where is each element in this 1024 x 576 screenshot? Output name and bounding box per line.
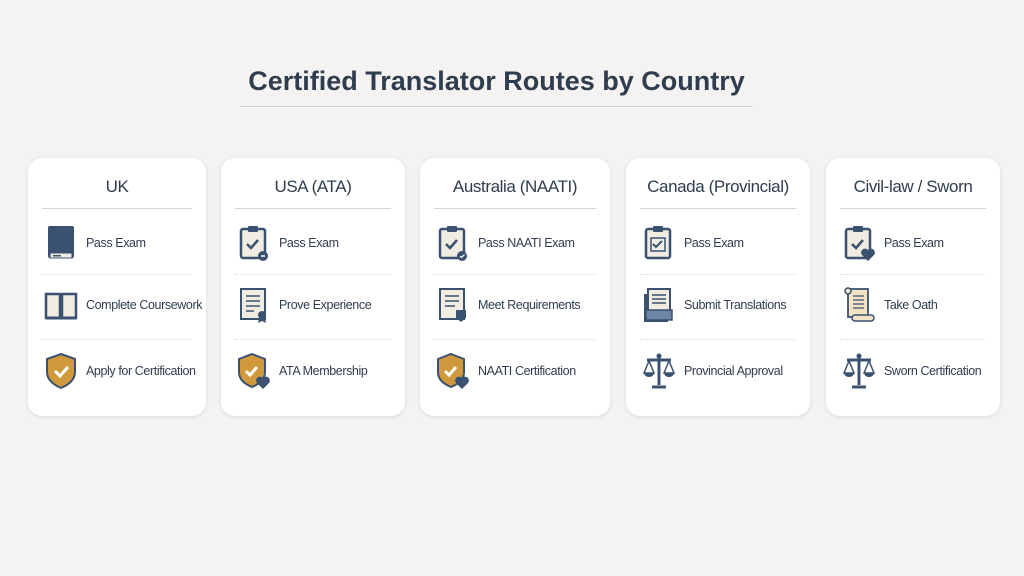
- title: Certified Translator Routes by Country: [248, 66, 745, 96]
- row: Prove Experience: [240, 288, 372, 323]
- heading: USA (ATA): USA (ATA): [274, 177, 352, 196]
- row: Complete Coursework: Complete Coursework: [86, 298, 202, 312]
- row: Meet Requirements: Meet Requirements: [478, 298, 580, 312]
- heading: UK: [42, 174, 192, 209]
- row: Pass Exam: Pass Exam: [86, 236, 146, 250]
- heading: Canada (Provincial): Canada (Provincial): [647, 177, 789, 196]
- row: Take Oath: [844, 287, 937, 322]
- panel: UK: [28, 158, 206, 416]
- row: Sworn Certification: Sworn Certification: [884, 364, 981, 378]
- heading: Civil-law / Sworn: [840, 174, 986, 209]
- row: Prove Experience: Prove Experience: [279, 298, 371, 312]
- row: NAATI Certification: NAATI Certification: [478, 364, 576, 378]
- row: Take Oath: Take Oath: [884, 298, 937, 312]
- row: Pass Exam: [48, 226, 146, 258]
- row: Submit Translations: Submit Translations: [684, 298, 786, 312]
- panel: Canada: [626, 158, 810, 416]
- row: ATA Membership: [238, 352, 368, 389]
- row: Meet Requirements: [439, 288, 580, 322]
- row: Provincial Approval: Provincial Approval: [684, 364, 783, 378]
- row: Pass NAATI Exam: [438, 226, 575, 261]
- panel: Civil-law: [826, 158, 1000, 416]
- row: Complete Coursework: [44, 292, 202, 320]
- row: Pass Exam: [240, 226, 339, 261]
- heading: USA (ATA): [235, 174, 391, 209]
- row: Pass NAATI Exam: Pass NAATI Exam: [478, 236, 575, 250]
- panel: USA: [221, 158, 405, 416]
- row: Provincial Approval: [642, 354, 783, 388]
- row: Submit Translations: [644, 288, 786, 322]
- heading: UK: UK: [106, 177, 128, 196]
- row: Pass Exam: Pass Exam: [684, 236, 744, 250]
- row: Pass Exam: [644, 226, 744, 260]
- row: ATA Membership: ATA Membership: [279, 364, 367, 378]
- row: Pass Exam: [844, 226, 944, 261]
- heading: Civil-law / Sworn: Civil-law / Sworn: [854, 177, 972, 196]
- panel: Australia: [420, 158, 610, 416]
- heading: Australia (NAATI): Australia (NAATI): [453, 177, 577, 196]
- row: Apply for Certification: [46, 353, 196, 390]
- row: Apply for Certification: Apply for Certification: [86, 364, 196, 378]
- row: Pass Exam: Pass Exam: [884, 236, 944, 250]
- row: Sworn Certification: [842, 354, 981, 388]
- heading: Australia (NAATI): [434, 174, 596, 209]
- row: Pass Exam: Pass Exam: [279, 236, 339, 250]
- row: NAATI Certification: [437, 352, 576, 389]
- heading: Canada (Provincial): [640, 174, 796, 209]
